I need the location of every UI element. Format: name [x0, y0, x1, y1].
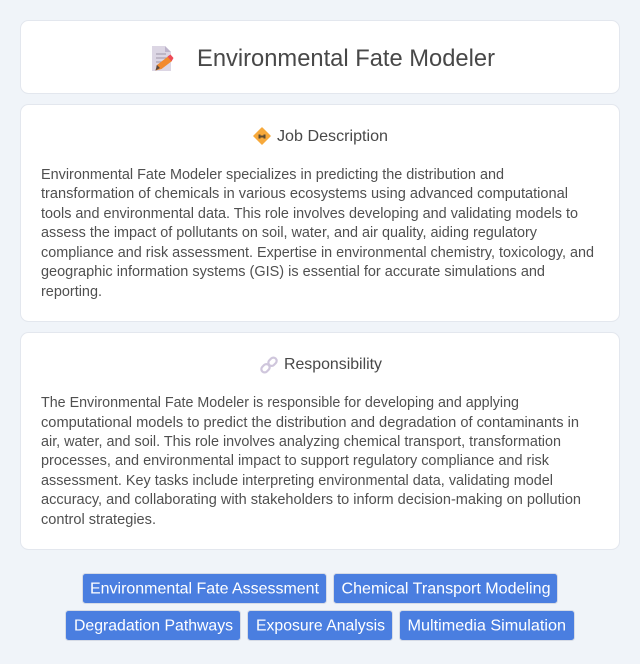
text block: responsibility: processes, and environmental impact to support regulatory compliance and risk [41, 453, 550, 469]
tag: multimedia simulation [400, 610, 574, 640]
text block: responsibility: computational models to predict the distribution and degradation of contaminants in [41, 415, 579, 431]
tag: exposure analysis [248, 610, 392, 640]
icon: chain link [260, 356, 278, 374]
icon: orange diamond [254, 128, 270, 144]
panel: responsibility [20, 332, 620, 550]
text block: job description: assess the impact of pollutants on soil, water, and air quality, aiding regulatory [41, 225, 538, 241]
text block: job description: tools and environmental data. This role involves developing and validating models to [41, 206, 578, 222]
text block: responsibility: The Environmental Fate Modeler is responsible for developing and applying [41, 395, 519, 411]
text block: responsibility [41, 395, 581, 528]
text block: job description: Environmental Fate Modeler specializes in predicting the distribution and [41, 167, 504, 183]
tag: degradation pathways [66, 610, 240, 640]
text block: responsibility: control strategies. [41, 512, 156, 528]
text block: job description: geographic information systems (GIS) is essential for accurate simulations and [41, 264, 545, 280]
icon: document with pencil [152, 46, 174, 71]
tag: environmental fate assessment [82, 574, 326, 604]
tag: environmental fate assessment: Environmental Fate Assessment [90, 580, 320, 598]
panel: job description [20, 104, 620, 322]
title: Environmental Fate Modeler [197, 45, 495, 72]
heading: job description: Job Description [277, 128, 388, 145]
text block: responsibility: accuracy, and collaborating with stakeholders to inform decision-making on pollution [41, 492, 581, 508]
text block: job description: reporting. [41, 284, 102, 300]
text block: job description: transformation of chemicals in various ecosystems using advanced computational [41, 186, 568, 202]
text block: responsibility: assessment. Key tasks include interpreting environmental data, validating model [41, 473, 553, 489]
text block: responsibility: air, water, and soil. This role involves analyzing chemical transport, transformation [41, 434, 561, 450]
tag: degradation pathways: Degradation Pathways [74, 618, 233, 634]
tag: exposure analysis: Exposure Analysis [256, 618, 385, 634]
heading: responsibility: Responsibility [284, 356, 382, 373]
text block: job description [41, 167, 594, 300]
text block: job description: compliance and risk assessment. Expertise in environmental chemistry, toxicology, and [41, 245, 594, 261]
tag: chemical transport modeling: Chemical Transport Modeling [342, 580, 550, 598]
tag: chemical transport modeling [334, 574, 558, 604]
tag: multimedia simulation: Multimedia Simulation [408, 618, 566, 634]
skill tags [66, 574, 574, 640]
panel: title card [20, 20, 620, 94]
